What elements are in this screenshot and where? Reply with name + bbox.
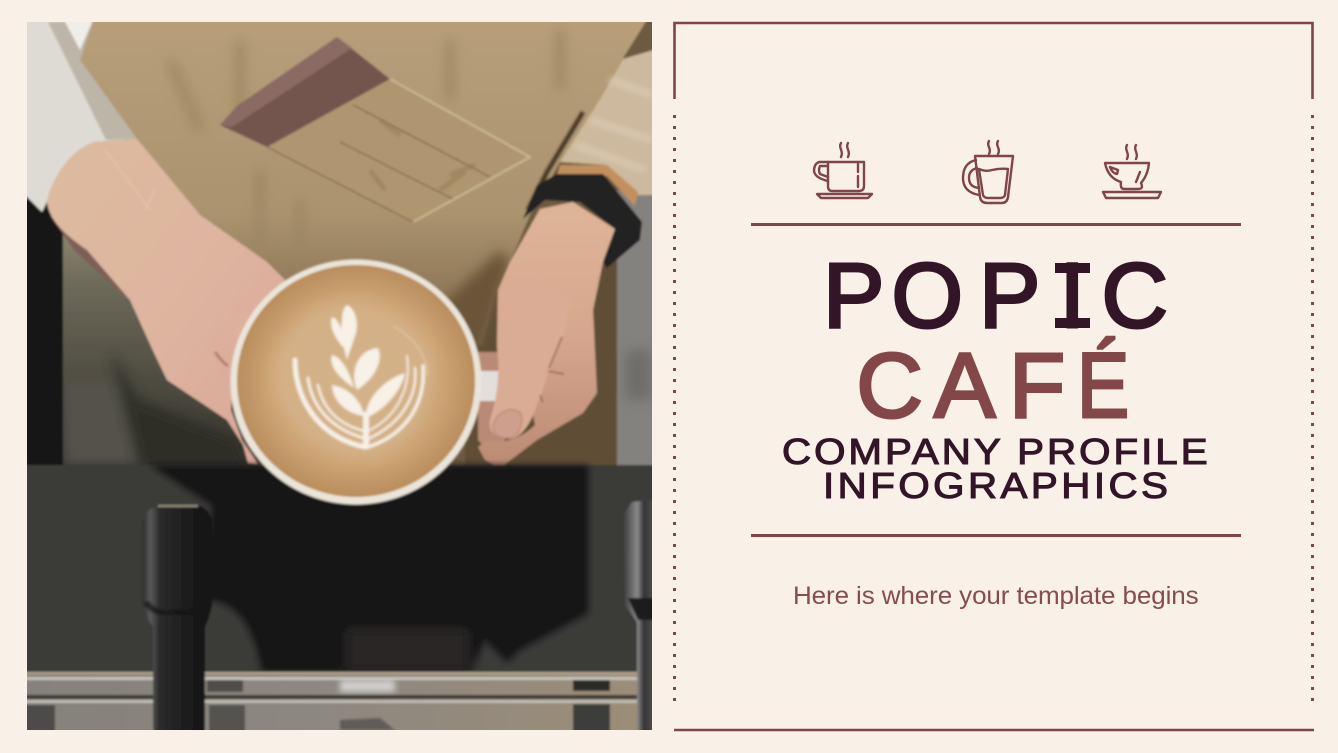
left forearm and hand bbox=[47, 139, 290, 464]
title: Café: CAF bbox=[856, 335, 1065, 437]
left sleeve bbox=[27, 22, 132, 214]
skin above watch bbox=[557, 165, 638, 206]
icon: tall glass mug bbox=[963, 141, 1013, 203]
back wall left bbox=[61, 234, 260, 466]
right grey wall bbox=[616, 188, 652, 466]
photo: barista holding latte bbox=[20, 15, 660, 735]
thumbnail bbox=[493, 410, 522, 438]
steel tray bbox=[20, 672, 637, 732]
subtitle: Here is where your template begins bbox=[793, 582, 1199, 610]
counter bbox=[20, 465, 660, 675]
icon: tapered cup on saucer bbox=[1103, 145, 1161, 198]
brown shadow behind right hand bbox=[465, 250, 617, 470]
title: Popic: POPIC bbox=[823, 245, 1168, 347]
tap handle left bbox=[142, 505, 212, 735]
icon: coffee cup on saucer bbox=[814, 143, 872, 198]
bottom divider bbox=[751, 534, 1241, 537]
decorative frame bbox=[674, 23, 1314, 730]
fingers behind handle bbox=[476, 350, 506, 445]
latte art bbox=[331, 305, 405, 447]
reddish cuff under forearm bbox=[50, 215, 130, 302]
cup bbox=[230, 260, 482, 504]
apron bbox=[80, 15, 650, 345]
title: Café: É bbox=[1077, 335, 1129, 437]
right sleeve bbox=[560, 48, 660, 195]
pocket flap bbox=[220, 37, 390, 147]
tap handle right bbox=[624, 499, 652, 730]
dark left wall bbox=[27, 196, 64, 466]
right hand bbox=[478, 202, 615, 468]
pocket bbox=[267, 79, 530, 222]
watch bbox=[523, 174, 642, 268]
heading: company profile: COMPANY PROFILE bbox=[782, 432, 1208, 472]
thumb bbox=[489, 330, 558, 440]
top divider bbox=[751, 223, 1241, 226]
heading: infographics: INFOGRAPHICS bbox=[823, 466, 1168, 506]
cup handle bbox=[479, 370, 500, 402]
